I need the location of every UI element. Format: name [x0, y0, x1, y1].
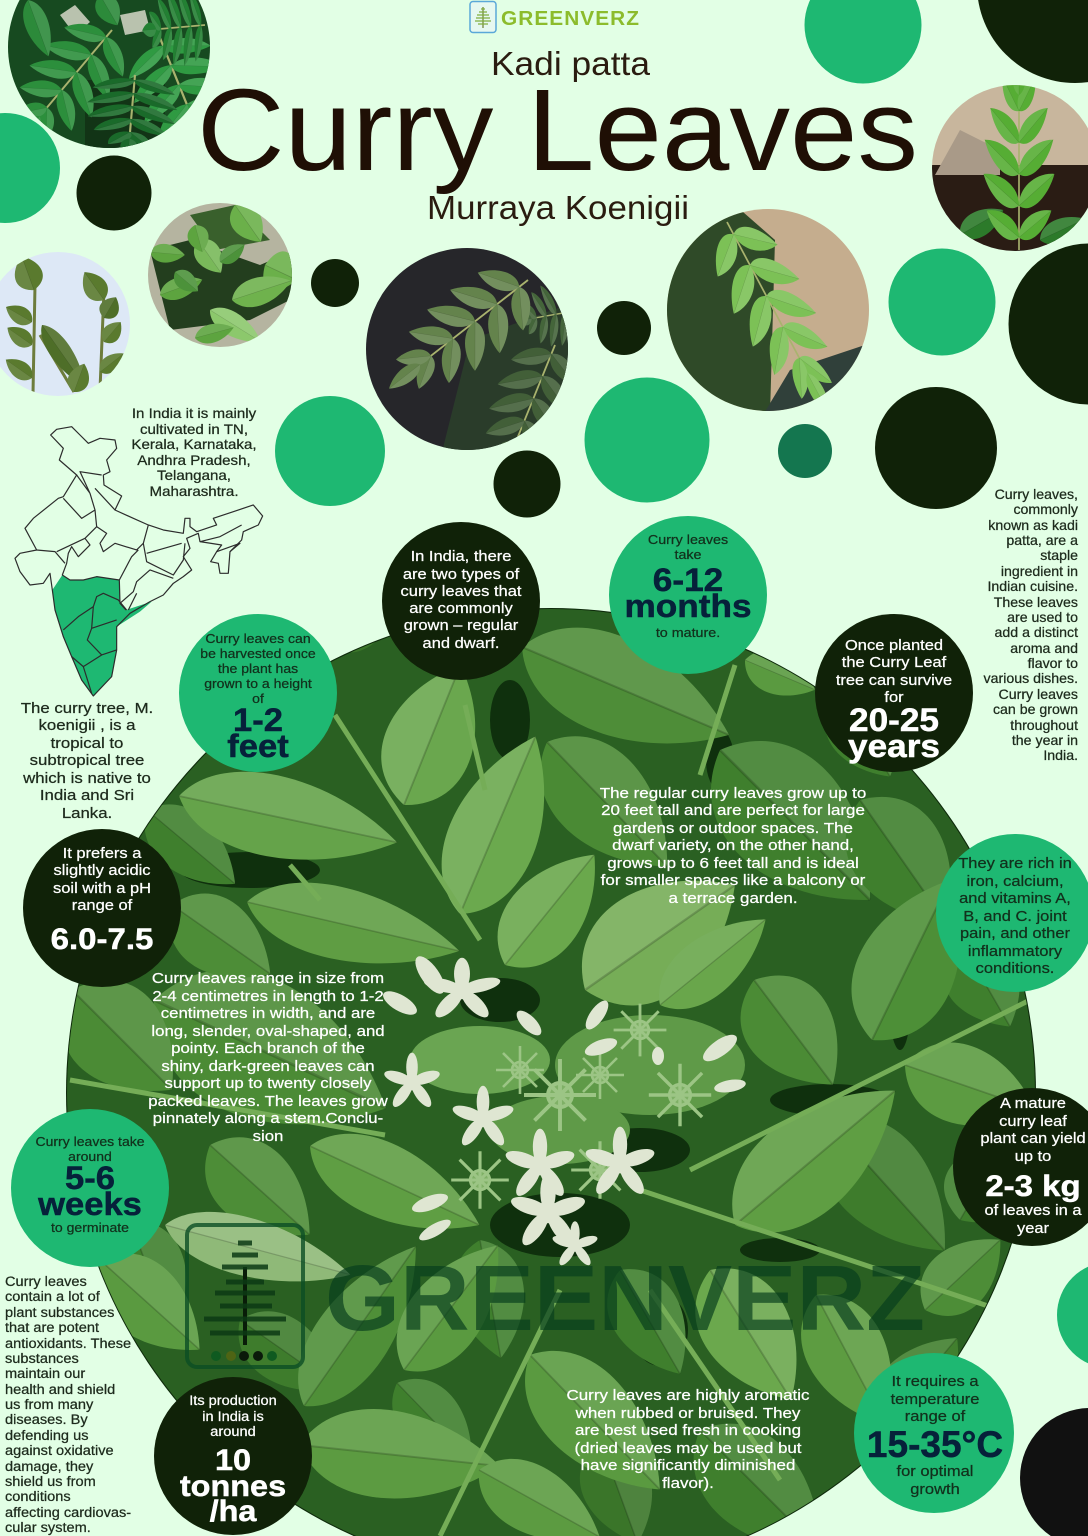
callout: nutrients: conditions. — [976, 961, 1054, 977]
watermark logo: GREENVERZ — [325, 1246, 925, 1350]
callout: soil pH: It prefers a — [63, 846, 142, 862]
callout: harvest height: grown to a height — [204, 676, 312, 691]
text: plant substances: substances — [5, 1351, 79, 1366]
text: curry leaves in Indian cuisine: aroma and — [1010, 640, 1078, 656]
callout: harvest height: the plant has — [218, 661, 298, 676]
text: plant substances: that are potent — [5, 1320, 99, 1335]
text on image: regular and dwarf — [600, 786, 866, 907]
text: plant substances: us from many — [5, 1397, 93, 1412]
callout: production: /ha — [210, 1494, 257, 1528]
callout: harvest height: 1-2 — [233, 703, 283, 739]
callout: yield: A mature — [1000, 1096, 1066, 1112]
text: cultivation in India — [131, 407, 257, 500]
text on image: leaf size — [148, 971, 388, 1145]
callout: temperature: range of — [905, 1409, 966, 1425]
callout: nutrients: pain, and other — [960, 926, 1070, 942]
callout: temperature — [854, 1353, 1014, 1513]
text: native range: Lanka. — [62, 806, 112, 822]
text: native range: subtropical tree — [30, 753, 145, 769]
light leaves — [157, 648, 1048, 1536]
text: plant substances: antioxidants. These — [5, 1336, 131, 1351]
title: Curry Leaves — [197, 65, 918, 195]
callout: germination: weeks — [37, 1187, 142, 1223]
callout: production: 10 — [215, 1443, 251, 1477]
text on image: aroma: are best used fresh in cooking — [575, 1423, 801, 1439]
text: curry leaves in Indian cuisine: India. — [1043, 747, 1078, 763]
text on image: leaf size: sion — [253, 1129, 283, 1145]
text: cultivation in India: Telangana, — [157, 469, 231, 484]
callout: two types: curry leaves that — [401, 584, 522, 600]
text: cultivation in India: Andhra Pradesh, — [137, 454, 251, 469]
text: curry leaves in Indian cuisine: throughout — [1010, 717, 1078, 733]
callout: lifespan: tree can survive — [836, 673, 952, 689]
callout: two types — [382, 522, 540, 680]
logo top: GREENVERZ — [501, 8, 640, 30]
shadow gaps — [184, 680, 908, 1366]
stems — [70, 665, 1030, 1536]
callout: soil pH: range of — [72, 898, 133, 914]
callout: two types: are commonly — [409, 601, 513, 617]
callout: soil pH — [23, 829, 181, 987]
text on image: leaf size: support up to twenty closely — [164, 1076, 372, 1092]
text on image: leaf size: pinnately along a stem.Conclu- — [153, 1111, 383, 1127]
text: curry leaves in Indian cuisine: patta, are a — [1006, 532, 1078, 548]
text: plant substances: maintain our — [5, 1366, 86, 1381]
text: cultivation in India: Maharashtra. — [149, 485, 239, 500]
callout: production: around — [210, 1424, 256, 1439]
callout: months to mature: Curry leaves — [648, 533, 728, 547]
text: plant substances: shield us from — [5, 1474, 96, 1489]
callout: germination: Curry leaves take — [35, 1134, 145, 1149]
callout: soil pH: 6.0-7.5 — [51, 921, 153, 956]
callout: germination — [11, 1109, 169, 1267]
text on image: leaf size: Curry leaves range in size from — [152, 971, 384, 987]
text: plant substances: diseases. By — [5, 1412, 88, 1427]
watermark logo — [187, 1225, 925, 1367]
photo: leaves on bark — [148, 203, 292, 347]
callout: two types: are two types of — [403, 567, 520, 583]
text: curry leaves in Indian cuisine: the year in — [1012, 732, 1078, 748]
text: curry leaves in Indian cuisine: These leaves — [994, 594, 1078, 610]
callout: temperature: growth — [910, 1482, 960, 1498]
text: plant substances: contain a lot of — [5, 1289, 100, 1304]
callout: yield: curry leaf — [999, 1114, 1068, 1130]
callout: lifespan: 20-25 — [849, 703, 939, 739]
callout: months to mature — [609, 516, 767, 674]
callout: temperature: for optimal — [897, 1464, 973, 1480]
callout: months to mature: take — [674, 548, 702, 562]
text: plant substances: against oxidative — [5, 1443, 114, 1458]
callout: nutrients: iron, calcium, — [966, 874, 1064, 890]
text: curry leaves in Indian cuisine — [984, 486, 1078, 763]
text: curry leaves in Indian cuisine: flavor to — [1028, 655, 1078, 671]
callout: two types: and dwarf. — [423, 636, 499, 652]
text on image: regular and dwarf: for smaller spaces like a balcony or — [601, 873, 866, 889]
text: plant substances: health and shield — [5, 1382, 115, 1397]
text: plant substances: plant substances — [5, 1305, 114, 1320]
callout: harvest height — [179, 614, 337, 772]
text: cultivation in India: In India it is mainly — [132, 407, 257, 422]
text on image: leaf size: long, slender, oval-shaped, and — [151, 1024, 385, 1040]
dark leaves — [95, 569, 1042, 1536]
callout: yield: of leaves in a — [984, 1203, 1082, 1219]
photo: dark soil leaves — [366, 248, 568, 450]
main illustration: curry leaves and flowers — [37, 569, 1048, 1536]
photo: curry leaf branches top left — [8, 0, 210, 148]
callout: production — [154, 1377, 312, 1535]
callout: temperature: It requires a — [891, 1374, 979, 1390]
callout: harvest height: feet — [227, 729, 289, 765]
text on image: aroma: when rubbed or bruised. They — [575, 1406, 800, 1422]
callout: two types: In India, there — [411, 549, 512, 565]
text: plant substances: affecting cardiovas- — [5, 1505, 131, 1520]
text: curry leaves in Indian cuisine: Indian cuisine. — [987, 578, 1078, 594]
text: curry leaves in Indian cuisine: are used to — [1007, 609, 1078, 625]
callout: production: Its production — [189, 1393, 277, 1408]
callout: harvest height: be harvested once — [200, 646, 316, 661]
photo: hanging branch — [667, 209, 869, 411]
text on image: leaf size: packed leaves. The leaves grow — [148, 1094, 388, 1110]
text on image: regular and dwarf: grows up to 6 feet tall and is ideal — [607, 856, 859, 872]
callout: yield — [953, 1088, 1088, 1246]
callout: germination: to germinate — [51, 1220, 129, 1235]
flowers — [380, 952, 747, 1268]
text on image: aroma: (dried leaves may be used but — [574, 1441, 802, 1457]
map of India — [15, 427, 263, 696]
callout: months to mature: to mature. — [656, 626, 720, 640]
callout: months to mature: months — [624, 589, 752, 625]
callout: harvest height: of — [252, 691, 264, 706]
text: curry leaves in Indian cuisine: known as kadi — [988, 517, 1078, 533]
text: curry leaves in Indian cuisine: ingredient in — [1001, 563, 1078, 579]
logo top — [470, 2, 640, 32]
photo: sky stems — [0, 252, 130, 396]
callout: temperature: temperature — [891, 1392, 980, 1408]
callout: nutrients: B, and C. joint — [963, 909, 1067, 925]
callout: yield: up to — [1015, 1149, 1052, 1165]
text on image: regular and dwarf: 20 feet tall and are perfect for large — [601, 803, 865, 819]
text: native range: which is native to — [22, 771, 151, 787]
text: native range — [21, 701, 153, 822]
text: cultivation in India: cultivated in TN, — [140, 423, 248, 438]
callout: nutrients: They are rich in — [958, 856, 1072, 872]
callout: lifespan: years — [848, 729, 940, 765]
text: native range: India and Sri — [40, 788, 134, 804]
callout: nutrients — [936, 834, 1088, 992]
text: plant substances: conditions — [5, 1489, 71, 1504]
callout: lifespan — [815, 614, 973, 772]
text on image: regular and dwarf: gardens or outdoor spaces. The — [613, 821, 853, 837]
text on image: regular and dwarf: dwarf variety, on the other hand, — [612, 838, 854, 854]
callout: germination: 5-6 — [65, 1161, 115, 1197]
text: curry leaves in Indian cuisine: commonly — [1013, 501, 1078, 517]
text on image: aroma — [567, 1388, 809, 1492]
text: cultivation in India: Kerala, Karnataka, — [131, 438, 257, 453]
callout: production: in India is — [202, 1409, 264, 1424]
text: native range: koenigii , is a — [38, 718, 136, 734]
text: plant substances: Curry leaves — [5, 1274, 87, 1289]
callout: yield: plant can yield — [980, 1131, 1086, 1147]
text on image: leaf size: centimetres in width, and are — [161, 1006, 375, 1022]
callout: nutrients: inflammatory — [968, 944, 1062, 960]
photo: young shoot — [932, 85, 1088, 251]
callout: yield: year — [1017, 1221, 1049, 1237]
text: native range: tropical to — [51, 736, 124, 752]
callout: temperature: 15-35°C — [867, 1424, 1003, 1465]
callout: lifespan: for — [884, 690, 904, 706]
text: plant substances: damage, they — [5, 1459, 93, 1474]
text on image: aroma: have significantly diminished — [581, 1458, 795, 1474]
text: native range: The curry tree, M. — [21, 701, 153, 717]
text: plant substances — [5, 1274, 131, 1535]
text: curry leaves in Indian cuisine: can be grown — [993, 701, 1078, 717]
text on image: leaf size: shiny, dark-green leaves can — [161, 1059, 375, 1075]
callout: lifespan: the Curry Leaf — [842, 655, 947, 671]
callout: yield: 2-3 kg — [985, 1168, 1081, 1203]
text on image: aroma: flavor). — [662, 1476, 714, 1492]
text on image: leaf size: 2-4 centimetres in length to 1-2 — [152, 989, 384, 1005]
callout: two types: grown – regular — [404, 618, 518, 634]
callout: harvest height: Curry leaves can — [205, 631, 311, 646]
callout: germination: around — [68, 1149, 112, 1164]
text: curry leaves in Indian cuisine: Curry leaves — [999, 686, 1078, 702]
callout: months to mature: 6-12 — [653, 563, 723, 599]
text on image: regular and dwarf: a terrace garden. — [668, 891, 798, 907]
text on image: leaf size: pointy. Each branch of the — [171, 1041, 365, 1057]
callout: production: tonnes — [180, 1469, 286, 1503]
subtitle: botanical name: Murraya Koenigii — [427, 189, 689, 226]
callout: soil pH: slightly acidic — [53, 863, 151, 879]
text: plant substances: defending us — [5, 1428, 88, 1443]
subtitle: Kadi patta: Kadi patta — [491, 45, 651, 82]
callout: lifespan: Once planted — [845, 638, 943, 654]
text: curry leaves in Indian cuisine: add a distinct — [995, 624, 1078, 640]
text on image: aroma: Curry leaves are highly aromatic — [567, 1388, 809, 1404]
text: curry leaves in Indian cuisine: staple — [1040, 547, 1078, 563]
text: curry leaves in Indian cuisine: Curry leaves, — [995, 486, 1078, 502]
callout: soil pH: soil with a pH — [53, 881, 151, 897]
mid leaves — [37, 602, 1022, 1427]
text: plant substances: cular system. — [5, 1520, 91, 1535]
text: curry leaves in Indian cuisine: various dishes. — [984, 670, 1078, 686]
text on image: regular and dwarf: The regular curry leaves grow up to — [600, 786, 866, 802]
flower backing — [410, 1015, 745, 1164]
callout: nutrients: and vitamins A, — [959, 891, 1071, 907]
